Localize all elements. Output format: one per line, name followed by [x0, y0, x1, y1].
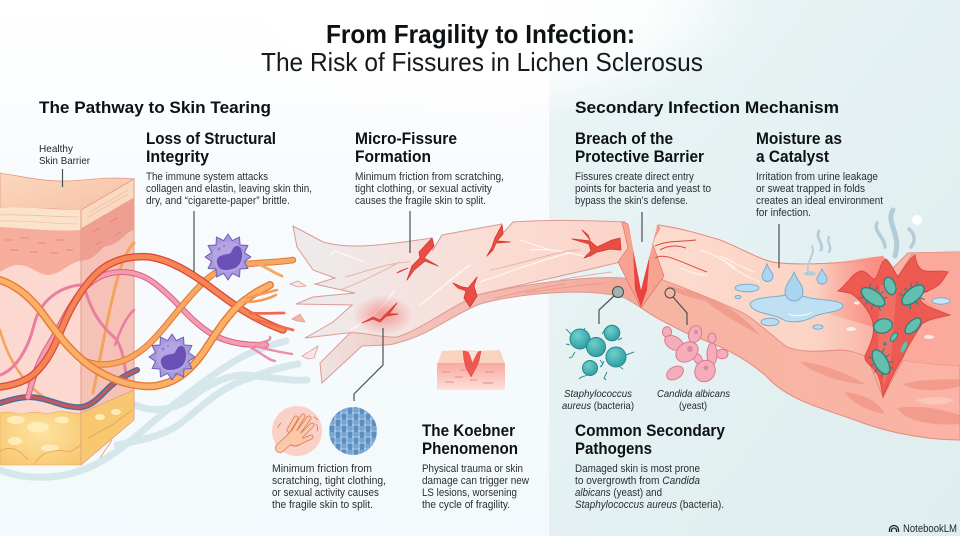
- text block: micro-fissure formation: tight clothing, or sexual activity: [355, 183, 493, 195]
- label: healthy skin barrier: [39, 144, 91, 167]
- text block: moisture as a catalyst: [756, 130, 883, 219]
- icon: woven fabric: [329, 407, 377, 455]
- steam wisps: [804, 210, 922, 276]
- immune cell upper: [205, 234, 251, 280]
- text block: the Koebner phenomenon: the cycle of fragility.: [422, 499, 510, 511]
- text block: loss of structural integrity: dry, and “cigarette-paper” brittle.: [146, 195, 290, 207]
- text block: the Koebner phenomenon: Phenomenon: [422, 440, 518, 458]
- caption: friction: or sexual activity causes: [272, 487, 379, 499]
- text block: breach of the protective barrier: [575, 130, 711, 207]
- caption: friction: the fragile skin to split.: [272, 499, 373, 511]
- text block: moisture as a catalyst: Irritation from urine leakage: [756, 171, 878, 183]
- text block: moisture as a catalyst: or sweat trapped in folds: [756, 183, 865, 195]
- section heading: pathway: The Pathway to Skin Tearing: [39, 98, 271, 117]
- text block: micro-fissure formation: Formation: [355, 148, 431, 166]
- text block: moisture as a catalyst: creates an ideal environment: [756, 195, 883, 207]
- lower layer streaks: [495, 272, 612, 298]
- irritation glow: [353, 295, 413, 335]
- text block: micro-fissure formation: causes the fragile skin to split.: [355, 195, 486, 207]
- text block: common secondary pathogens: Common Secondary: [575, 422, 726, 440]
- text block: loss of structural integrity: [146, 130, 312, 207]
- crater red wall: [838, 255, 950, 397]
- band body: [640, 225, 960, 440]
- pink elastin fibre: [28, 272, 292, 397]
- text block: loss of structural integrity: Integrity: [146, 148, 210, 166]
- breach notch: [618, 222, 707, 308]
- right skin band, infected section: [618, 222, 960, 440]
- text block: the Koebner phenomenon: LS lesions, worsening: [422, 487, 517, 499]
- title: From Fragility to Infection:: [326, 19, 635, 49]
- text block: loss of structural integrity: collagen and elastin, leaving skin thin,: [146, 183, 312, 195]
- text block: loss of structural integrity: The immune system attacks: [146, 171, 268, 183]
- tissue streaks: [665, 285, 960, 424]
- collagen and elastin fibres: [0, 243, 293, 407]
- text block: micro-fissure formation: Minimum friction from scratching,: [355, 171, 504, 183]
- bacteria rods: [856, 276, 931, 380]
- pale ghost fibres: [0, 341, 307, 477]
- text block: the Koebner phenomenon: Physical trauma or skin: [422, 463, 523, 475]
- text block: common secondary pathogens: Pathogens: [575, 440, 652, 458]
- papillary and reticular dermis: [0, 179, 134, 465]
- text block: the Koebner phenomenon: The Koebner: [422, 422, 516, 440]
- infected fissure crater: [812, 252, 960, 397]
- red cracks: [362, 225, 621, 323]
- callout dot: bacteria entry: [612, 286, 624, 298]
- dermis layer: [0, 198, 134, 275]
- Candida albicans illustration: [662, 324, 728, 386]
- caption: Candida albicans: (yeast): [679, 401, 707, 412]
- epidermis layer: [0, 179, 134, 231]
- text block: breach of the protective barrier: Protective Barrier: [575, 148, 705, 166]
- text block: common secondary pathogens: albicans (yeast) and: [575, 487, 662, 499]
- caption: Candida albicans: Candida albicans: [657, 389, 730, 400]
- text block: the Koebner phenomenon: [422, 422, 529, 511]
- caption: Staphylococcus aureus: aureus (bacteria): [562, 401, 634, 412]
- callout dot: yeast entry: [665, 288, 675, 298]
- text block: moisture as a catalyst: a Catalyst: [756, 148, 829, 166]
- skin shards: [290, 281, 318, 359]
- leader lines: [62, 169, 779, 401]
- red-orange collagen fibre: [0, 257, 293, 387]
- text block: micro-fissure formation: Micro-Fissure: [355, 130, 457, 148]
- text block: breach of the protective barrier: Breach of the: [575, 130, 673, 148]
- text block: loss of structural integrity: Loss of Structural: [146, 130, 276, 148]
- caption: friction: scratching, tight clothing,: [272, 475, 386, 487]
- skin cross-section block: [0, 173, 134, 465]
- caption: Candida albicans: [657, 389, 730, 412]
- caption: friction: [272, 463, 386, 511]
- text block: breach of the protective barrier: bypass the skin’s defense.: [575, 195, 688, 207]
- surface creases: [330, 240, 590, 330]
- thin fibres: [0, 243, 134, 397]
- text block: common secondary pathogens: Damaged skin is most prone: [575, 463, 700, 475]
- label: healthy skin barrier: Healthy: [39, 144, 74, 155]
- icon: hand: [272, 406, 322, 456]
- text block: moisture as a catalyst: Moisture as: [756, 130, 842, 148]
- subcutaneous fat layer: [0, 390, 134, 465]
- text block: moisture as a catalyst: for infection.: [756, 207, 811, 219]
- caption: Staphylococcus aureus: [562, 389, 634, 412]
- text block: common secondary pathogens: to overgrowth from Candida: [575, 475, 700, 487]
- caption: Staphylococcus aureus: Staphylococcus: [564, 389, 632, 400]
- text block: common secondary pathogens: [575, 422, 726, 511]
- Staphylococcus aureus illustration: [566, 325, 634, 380]
- caption: friction: Minimum friction from: [272, 463, 372, 475]
- orange collagen fibre behind: [83, 260, 293, 364]
- title: [261, 19, 703, 77]
- main orange collagen fibre: [0, 280, 277, 386]
- lower dermal layer: [320, 278, 640, 383]
- Koebner lesion illustration: [437, 350, 505, 390]
- vein: [0, 370, 137, 407]
- text block: common secondary pathogens: Staphylococcus aureus (bacteria).: [575, 499, 724, 511]
- text block: breach of the protective barrier: Fissures create direct entry: [575, 171, 695, 183]
- top surface of skin: [0, 173, 134, 211]
- immune cell lower: [149, 334, 195, 380]
- moisture puddle and drops: [735, 264, 950, 329]
- text block: breach of the protective barrier: points for bacteria and yeast to: [575, 183, 711, 195]
- crater flaps: [812, 256, 898, 327]
- torn skin band, fragile section: [293, 220, 640, 383]
- band upper layer: [648, 225, 960, 397]
- label: healthy skin barrier: Skin Barrier: [39, 156, 91, 167]
- text block: the Koebner phenomenon: damage can trigger new: [422, 475, 529, 487]
- section heading: infection: Secondary Infection Mechanism: [575, 98, 839, 117]
- title: The Risk of Fissures in Lichen Sclerosus: [261, 47, 703, 77]
- text block: micro-fissure formation: [355, 130, 504, 207]
- upper epidermal layer: [293, 220, 636, 338]
